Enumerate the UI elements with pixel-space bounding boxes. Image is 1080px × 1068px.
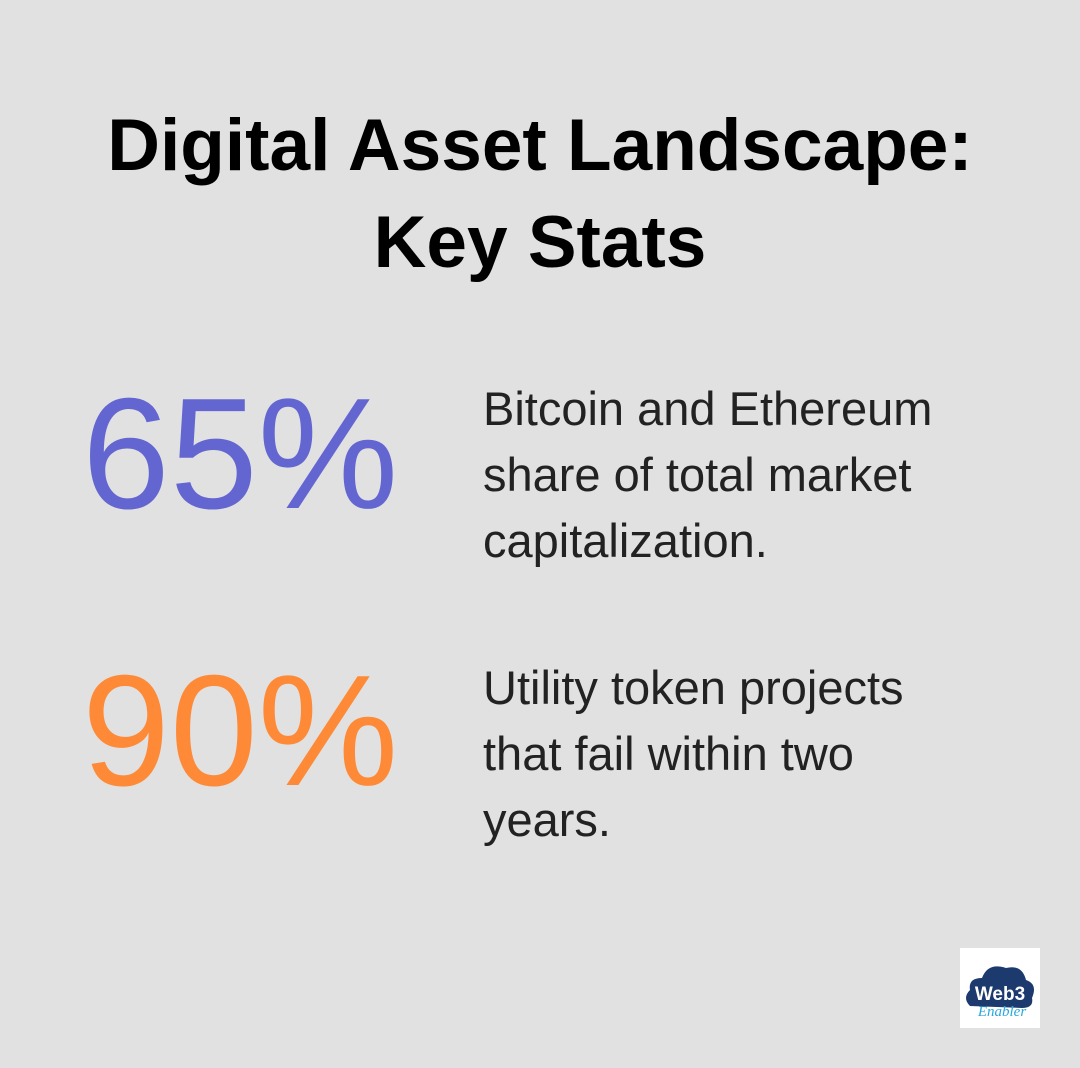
description: 65% <box>483 382 932 567</box>
description: 65%: capitalization. <box>483 514 768 567</box>
title <box>107 105 973 283</box>
title: Digital Asset Landscape: <box>107 105 973 186</box>
description: 90% <box>483 661 904 846</box>
description: 90%: years. <box>483 793 611 846</box>
description: 65%: share of total market <box>483 448 911 501</box>
description: 90%: that fail within two <box>483 727 854 780</box>
stat: 90%: 90% <box>82 643 398 819</box>
logo: Web3 Enabler <box>960 948 1040 1028</box>
stat: 65%: 65% <box>82 366 398 542</box>
title: Key Stats <box>374 202 706 283</box>
description: 65%: Bitcoin and Ethereum <box>483 382 932 435</box>
logo: Web3 Enabler: Enabler <box>977 1004 1026 1020</box>
logo: Web3 Enabler: Web3 <box>975 984 1025 1005</box>
description: 90%: Utility token projects <box>483 661 904 714</box>
